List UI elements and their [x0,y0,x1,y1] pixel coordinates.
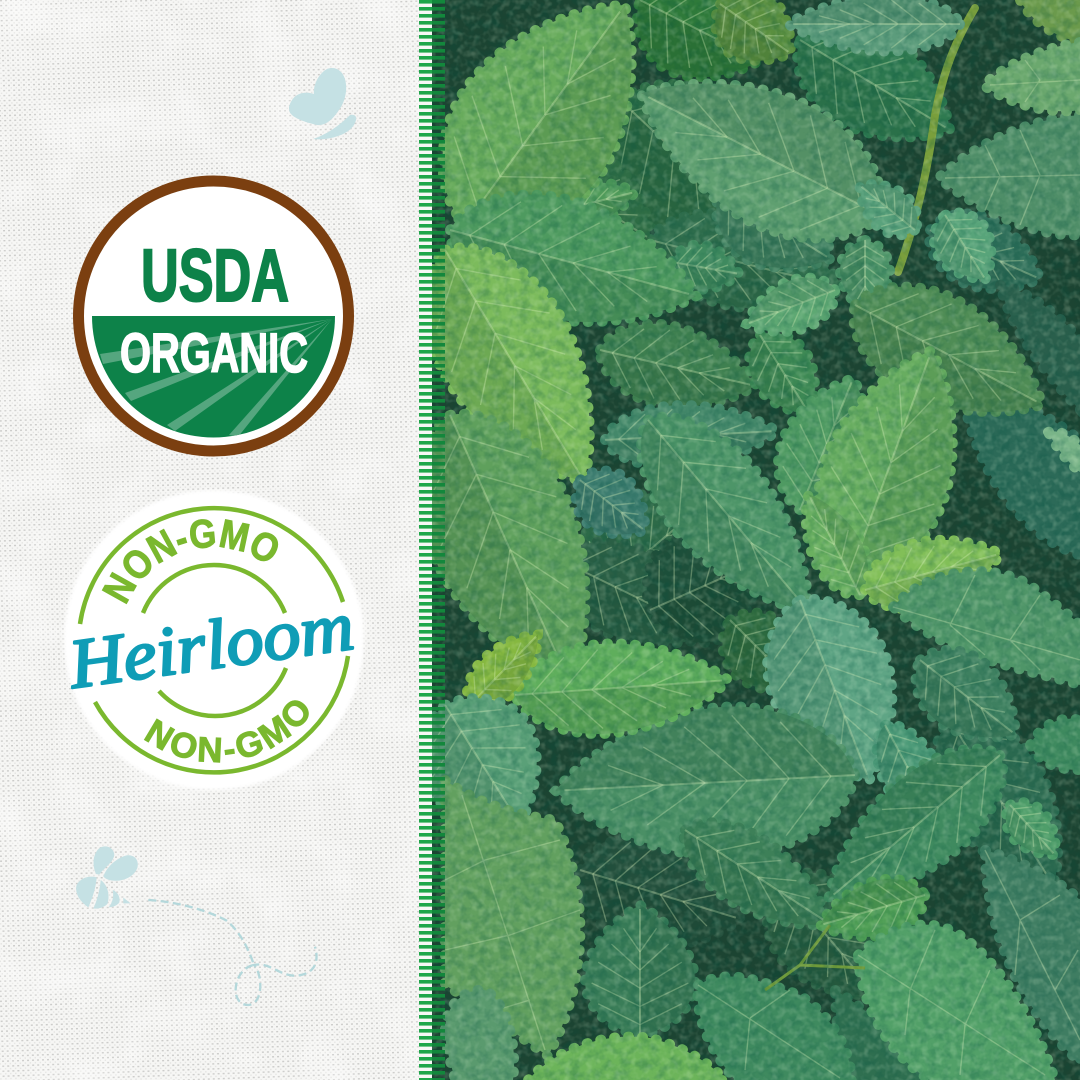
foreground leaves [384,0,1080,1080]
stem [898,8,975,272]
upper NON-GMO text: NON-GMO [102,519,278,604]
green half circle [92,316,335,438]
stitched green stripe border [419,0,445,1080]
white halo [64,490,364,790]
badge: Non-GMO Heirloom stamp [62,488,365,791]
icon: butterfly [289,68,356,139]
field rays [100,319,332,437]
Heirloom script word: Heirloom [63,588,358,704]
photo: lemon balm leaves [384,0,1080,1080]
seal ring [78,181,348,451]
bee [76,846,138,909]
panel: linen background [0,0,420,1080]
USDA wordmark: USDA [141,234,289,317]
icon: bee with dashed flight path [76,846,317,1005]
background leaves in shade [516,0,1080,1080]
small stems [765,925,865,990]
stamp arcs [80,508,348,772]
ORGANIC wordmark: ORGANIC [120,321,308,384]
badge: USDA Organic seal [78,181,348,451]
lower NON-GMO text: NON-GMO [144,700,309,763]
flight path [148,900,317,1005]
